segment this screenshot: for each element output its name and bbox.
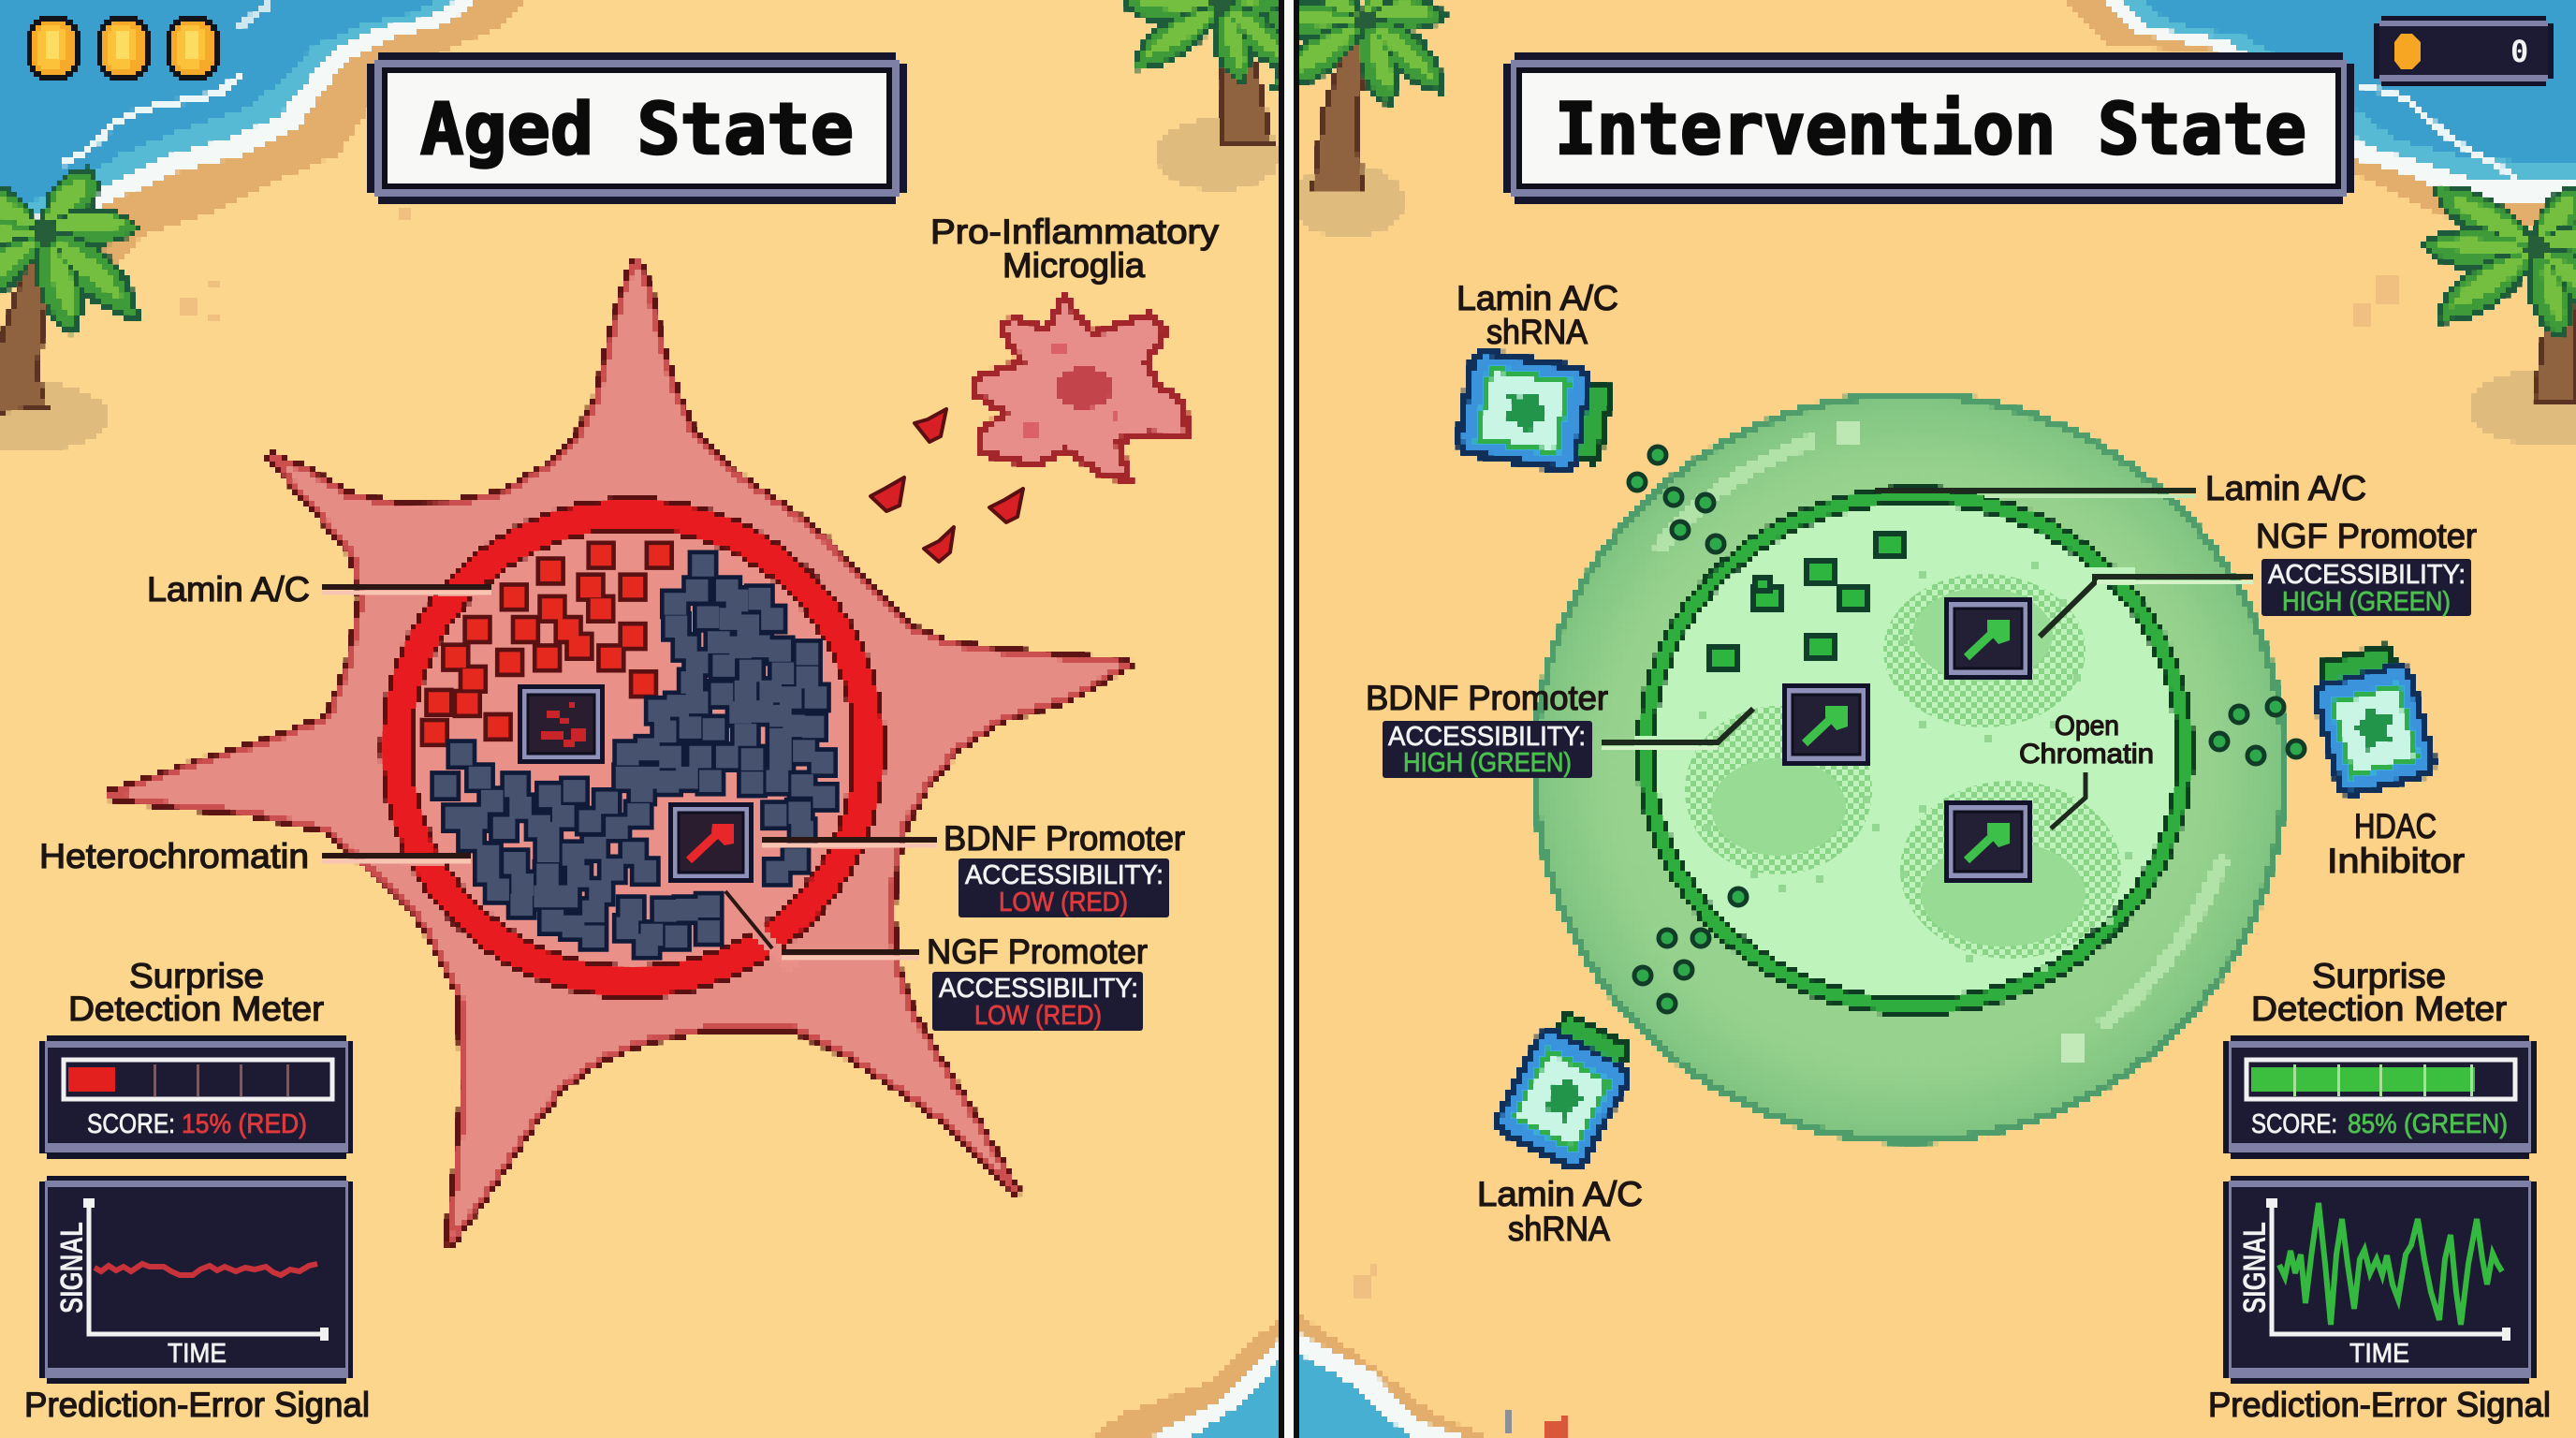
heading: surprise detection meter left: [68, 957, 324, 1028]
chip: silenced promoter: [515, 682, 607, 767]
signal chart right: active green trace: SIGNAL: [2237, 1222, 2273, 1313]
centre divider: [1279, 0, 1299, 1438]
leader lines: intervention panel: [1602, 491, 2253, 829]
ocean: top left: [0, 0, 526, 281]
chip: NGF promoter open: [1944, 597, 2032, 680]
title: Aged State: [367, 52, 907, 204]
tag: NGF accessibility low: ACCESSIBILITY:: [939, 974, 1138, 1004]
label: Prediction-Error Signal left: Prediction-Error Signal: [24, 1386, 370, 1424]
ocean: bottom of right panel: [1299, 1315, 1488, 1438]
coin 2: [97, 16, 151, 81]
palm tree: left edge: [0, 167, 139, 452]
lamin A/C squares: [434, 555, 659, 732]
open chromatin patch: upper right: [1883, 562, 2086, 742]
title: Aged State: Aged State: [420, 87, 854, 170]
tag: BDNF accessibility high: HIGH (GREEN): [1403, 748, 1572, 778]
title: Intervention State: Intervention State: [1555, 87, 2306, 170]
label: Lamin A/C shRNA bottom: shRNA: [1508, 1210, 1610, 1248]
tag: BDNF accessibility low: LOW (RED): [999, 888, 1128, 917]
heading: surprise detection meter right: [2251, 957, 2507, 1028]
round cell body and nucleus: [1535, 395, 2284, 1140]
drug particles: [1629, 447, 2305, 1012]
label: Lamin A/C shRNA bottom: [1477, 1175, 1643, 1248]
beach toy: [1503, 1410, 1568, 1438]
label: Open Chromatin: Chromatin: [2019, 739, 2154, 770]
score badge: [2374, 16, 2554, 86]
tag: BDNF accessibility high: [1383, 721, 1592, 778]
leader lines: aged panel: [322, 587, 937, 958]
coin 3: [167, 16, 220, 81]
open chromatin patch: lower right: [1900, 781, 2132, 972]
tag: NGF accessibility low: LOW (RED): [974, 1001, 1102, 1031]
tag: NGF accessibility high: [2261, 559, 2471, 617]
label: Pro-Inflammatory Microglia: Pro-Inflammatory: [930, 213, 1220, 251]
tag: BDNF accessibility low: ACCESSIBILITY:: [965, 860, 1164, 890]
lamin fragments: [1709, 534, 1904, 669]
meter panel right: score 85%: 85% (GREEN): [2348, 1109, 2508, 1139]
label: Heterochromatin: Heterochromatin: [39, 837, 309, 875]
open chromatin patch: left: [1685, 706, 1880, 892]
tag: NGF accessibility high: ACCESSIBILITY:: [2268, 560, 2466, 590]
label: NGF Promoter right: NGF Promoter: [2256, 517, 2477, 555]
label: Open Chromatin: [2019, 711, 2154, 770]
coins: [27, 16, 220, 81]
label: Lamin A/C right: Lamin A/C: [2205, 469, 2366, 507]
title: Intervention State: [1503, 52, 2354, 204]
label: NGF Promoter: NGF Promoter: [927, 932, 1148, 971]
chip: BDNF promoter open: [1782, 683, 1870, 766]
signal chart right: active green trace: TIME: [2349, 1339, 2409, 1369]
palm tree: right panel top left: [1262, 0, 1445, 237]
inflammatory signal droplets: [871, 409, 1023, 562]
chip: third promoter open: [1944, 800, 2032, 883]
label: BDNF Promoter: BDNF Promoter: [944, 819, 1185, 858]
microglia: [976, 298, 1187, 479]
signal chart left: flat red trace: SIGNAL: [54, 1222, 90, 1313]
panel: intervention neuron: [1535, 395, 2284, 1140]
tag: NGF accessibility low: [932, 972, 1143, 1031]
tag: NGF accessibility high: HIGH (GREEN): [2282, 587, 2451, 617]
bottle: lamin shRNA bottom: [1493, 1008, 1641, 1171]
label: HDAC Inhibitor: HDAC: [2354, 807, 2437, 845]
palm tree: left panel top right: [1123, 0, 1295, 190]
heading: surprise detection meter left: Surprise: [129, 957, 264, 995]
bottle: HDAC inhibitor: [2308, 642, 2436, 797]
label: HDAC Inhibitor: [2327, 807, 2465, 880]
label: Pro-Inflammatory Microglia: Microglia: [1003, 246, 1145, 285]
coin icon: [2394, 34, 2421, 69]
label: Prediction-Error Signal right: Prediction-Error Signal: [2208, 1386, 2551, 1424]
label: Lamin A/C shRNA top: Lamin A/C: [1456, 279, 1618, 317]
heading: surprise detection meter right: Detection Meter: [2251, 990, 2507, 1028]
meter panel left: score 15%: [39, 1035, 353, 1159]
label: Pro-Inflammatory Microglia: [930, 213, 1220, 285]
meter panel right: score 85%: [2223, 1035, 2537, 1159]
neuron body and nucleus envelope: [110, 262, 1127, 1243]
label: HDAC Inhibitor: Inhibitor: [2327, 842, 2465, 880]
meter panel left: score 15%: SCORE:: [87, 1109, 175, 1139]
bottle: lamin shRNA top: [1457, 351, 1613, 475]
chip: closed promoter arrow: [666, 800, 756, 886]
meter panel left: score 15%: 15% (RED): [182, 1109, 307, 1139]
label: Lamin A/C shRNA top: [1456, 279, 1618, 351]
coin 1: [27, 16, 80, 81]
heading: surprise detection meter left: Detection Meter: [68, 990, 324, 1028]
tag: BDNF accessibility high: ACCESSIBILITY:: [1388, 722, 1586, 752]
ocean: top right: [2064, 0, 2576, 225]
ocean: bottom of left panel: [1090, 1315, 1284, 1438]
label: Lamin A/C shRNA top: shRNA: [1486, 313, 1588, 351]
palm tree: right panel right edge: [2424, 186, 2576, 445]
tag: BDNF accessibility low: [959, 858, 1169, 917]
heterochromatin squares: [446, 565, 824, 945]
signal chart right: active green trace: [2223, 1176, 2537, 1384]
meter panel right: score 85%: SCORE:: [2251, 1109, 2337, 1139]
label: Lamin A/C shRNA bottom: Lamin A/C: [1477, 1175, 1643, 1213]
signal chart left: flat red trace: TIME: [168, 1339, 227, 1369]
heading: surprise detection meter right: Surprise: [2312, 957, 2446, 995]
panel: aged neuron: [110, 262, 1127, 1243]
sand speckles: [178, 208, 2396, 1296]
label: BDNF Promoter right: BDNF Promoter: [1366, 679, 1608, 717]
coin count: 0: [2510, 34, 2528, 69]
label: Lamin A/C: Lamin A/C: [147, 570, 310, 609]
label: Open Chromatin: Open: [2055, 711, 2119, 741]
signal chart left: flat red trace: [39, 1176, 353, 1384]
